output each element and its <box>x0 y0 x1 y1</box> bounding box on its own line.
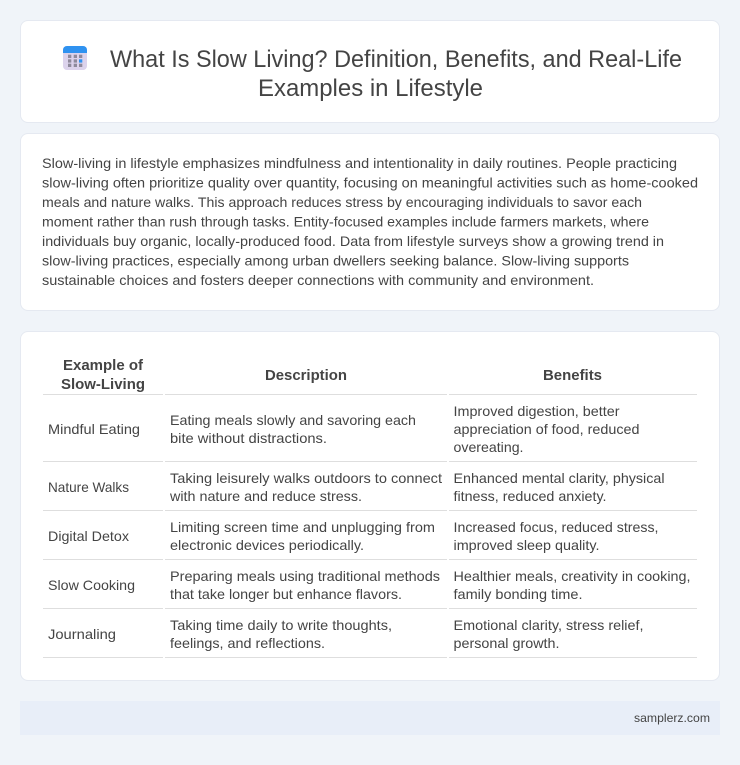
row: Mindful Eating: appreciation of food, reduced <box>454 421 640 437</box>
row: Digital Detox: electronic devices periodically. <box>170 537 364 553</box>
row: Nature Walks: fitness, reduced anxiety. <box>454 488 606 504</box>
row: Slow Cooking <box>48 568 690 602</box>
table: slow-living examples <box>43 357 697 658</box>
title: Examples in Lifestyle <box>258 75 483 102</box>
table header row: Example of <box>63 357 144 374</box>
table header row: Benefits <box>543 367 602 384</box>
row: Journaling: Taking time daily to write thoughts, <box>170 617 392 633</box>
row: Digital Detox: improved sleep quality. <box>454 537 600 553</box>
title <box>110 46 682 102</box>
row: Nature Walks: Enhanced mental clarity, physical <box>454 470 664 486</box>
text block: intro paragraph <box>42 155 698 288</box>
row: Mindful Eating <box>48 403 640 455</box>
text block: intro paragraph: slow-living often prioritize quality over quantity, focusing on meaningful activities such as home-cooked <box>42 174 698 190</box>
text block: intro paragraph: meals and nature walks. This approach reduces stress by encouraging individuals to savor each <box>42 194 642 210</box>
row: Mindful Eating: Mindful Eating <box>48 421 140 437</box>
row: Digital Detox: Digital Detox <box>48 528 129 544</box>
row: Journaling: Emotional clarity, stress relief, <box>454 617 644 633</box>
icon: calendar <box>63 46 87 70</box>
table header row <box>61 357 602 393</box>
row: Nature Walks: with nature and reduce stress. <box>169 488 362 504</box>
row: Slow Cooking: Slow Cooking <box>48 577 135 593</box>
title: What Is Slow Living? Definition, Benefits, and Real-Life <box>110 46 682 73</box>
footer text: samplerz.com <box>634 711 710 725</box>
row: Digital Detox: Increased focus, reduced stress, <box>454 519 658 535</box>
row: Nature Walks <box>48 470 664 504</box>
panel: footer bar <box>20 701 720 735</box>
row: Nature Walks: Taking leisurely walks outdoors to connect <box>170 470 442 486</box>
text block: intro paragraph: Slow-living in lifestyle emphasizes mindfulness and intentionality in daily routines. People practicing <box>42 155 677 171</box>
panel: table card <box>20 331 720 681</box>
row: Mindful Eating: bite without distractions. <box>170 430 327 446</box>
row: Journaling: Journaling <box>48 626 116 642</box>
row: Slow Cooking: Preparing meals using traditional methods <box>170 568 440 584</box>
row: Mindful Eating: overeating. <box>454 439 524 455</box>
row: Mindful Eating: Improved digestion, better <box>454 403 620 419</box>
panel: intro card <box>20 133 720 311</box>
row: Slow Cooking: that take longer but enhance flavors. <box>170 586 402 602</box>
row: Digital Detox: Limiting screen time and unplugging from <box>170 519 435 535</box>
table header row: Slow-Living <box>61 376 145 393</box>
text block: intro paragraph: moment rather than rush through tasks. Entity-focused examples include farmers markets, where <box>42 214 649 230</box>
row: Nature Walks: Nature Walks <box>48 479 129 495</box>
row: Digital Detox <box>48 519 658 553</box>
table header row: Description <box>265 367 347 384</box>
row: Journaling: personal growth. <box>454 635 560 651</box>
text block: intro paragraph: sustainable choices and fosters deeper connections with community and environment. <box>42 272 594 288</box>
row: Slow Cooking: Healthier meals, creativity in cooking, <box>454 568 690 584</box>
row: Slow Cooking: family bonding time. <box>454 586 582 602</box>
row: Mindful Eating: Eating meals slowly and savoring each <box>170 412 416 428</box>
text block: intro paragraph: individuals buy organic, locally-produced food. Data from lifestyle surveys show a growing trend in <box>42 233 664 249</box>
panel: title card <box>20 20 720 123</box>
row: Journaling <box>48 617 644 651</box>
row: Journaling: feelings, and reflections. <box>170 635 325 651</box>
text block: intro paragraph: slow-living practices, especially among urban dwellers seeking balance. Slow-living supports <box>42 252 629 268</box>
